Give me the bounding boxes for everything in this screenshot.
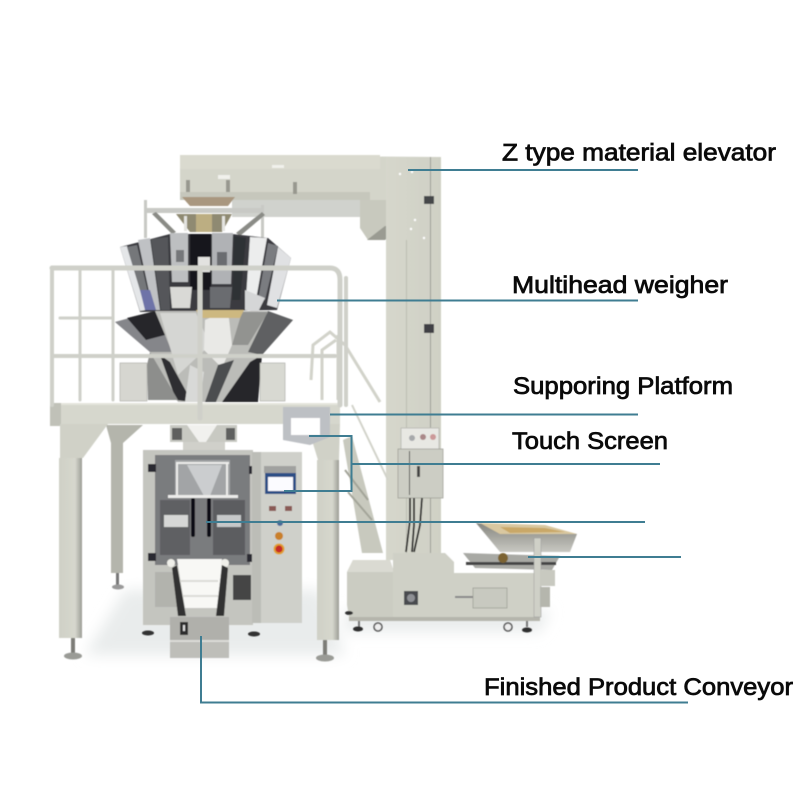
panel buttons — [269, 506, 276, 511]
left leg — [60, 424, 108, 458]
back leg — [106, 425, 143, 590]
leader: conveyor — [201, 636, 688, 702]
machine illustration — [50, 155, 577, 662]
floor shadow — [85, 590, 550, 655]
packing machine feet — [142, 630, 154, 636]
elevator top beam — [180, 155, 441, 200]
vibrating feeder hopper — [463, 523, 577, 617]
touch screen pouch — [283, 407, 330, 445]
lower cone — [115, 311, 293, 402]
stairs — [311, 332, 388, 553]
funnel and bagger head — [170, 425, 237, 450]
supporting platform — [50, 268, 346, 662]
leader: weigher — [277, 300, 638, 302]
upper buckets — [120, 234, 291, 312]
elevator base — [345, 553, 540, 632]
multihead weigher — [115, 200, 293, 402]
right leg — [307, 424, 340, 460]
elevator control box — [398, 428, 443, 498]
cables — [406, 498, 422, 552]
label: elevator: Z type material elevator — [502, 140, 776, 166]
control panel — [252, 452, 302, 623]
leader: feeder — [528, 556, 681, 558]
elevator chute — [360, 200, 398, 240]
label: touch screen: Touch Screen — [512, 428, 668, 455]
weigher top cone — [176, 214, 232, 232]
packing machine body — [143, 450, 253, 625]
elevator column — [386, 157, 441, 560]
label: platform: Supporing Platform — [513, 373, 733, 400]
Z type elevator — [180, 155, 441, 560]
leader: bagger — [206, 521, 645, 523]
label: conveyor: Finished Product Conveyor — [484, 674, 793, 701]
leader: touch screen — [284, 436, 660, 491]
label: weigher: Multihead weigher — [512, 272, 728, 299]
weigher frame — [144, 200, 265, 240]
finished product conveyor — [170, 617, 229, 658]
platform deck — [50, 403, 340, 424]
vertical packing machine — [142, 450, 302, 636]
leader: elevator — [408, 169, 638, 171]
guard rails — [52, 268, 346, 418]
bag film — [167, 559, 229, 616]
touch screen display — [265, 473, 296, 494]
weigher side boxes — [120, 363, 147, 401]
leader: platform — [330, 414, 638, 416]
